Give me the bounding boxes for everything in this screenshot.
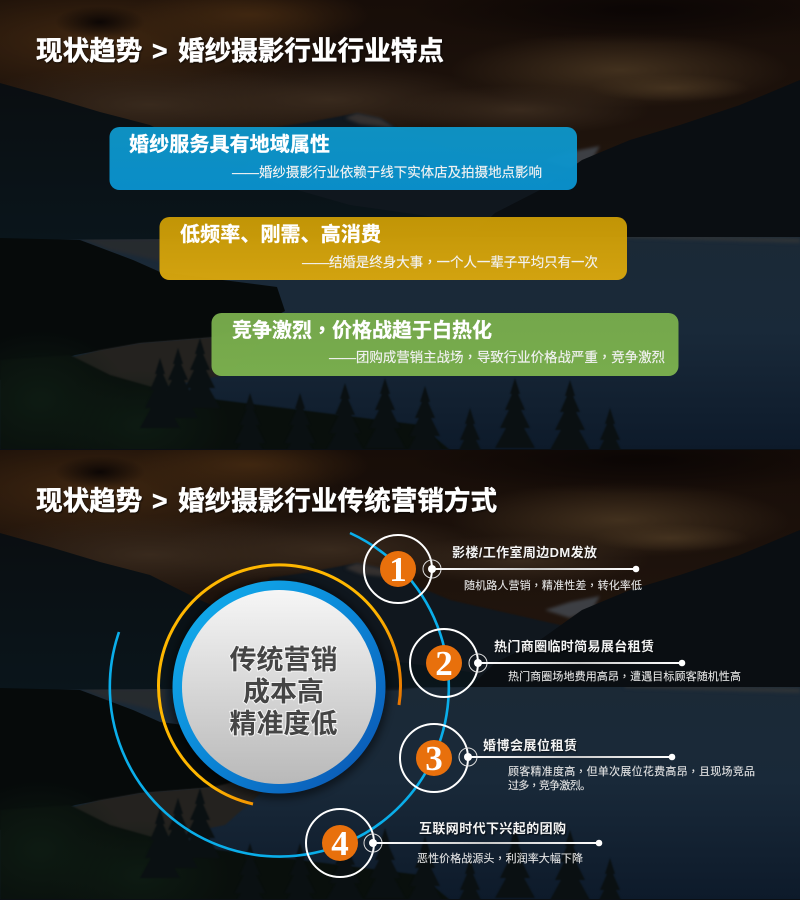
panel description: ——婚纱摄影行业依赖于线下实体店及拍摄地点影响	[232, 165, 542, 180]
item 3: wedding expo booth: 婚博会展位租赁	[483, 738, 577, 753]
heading: traditional marketing methods: 现状趋势	[36, 486, 142, 516]
item 2: temporary booth rental: 热门商圈临时简易展台租赁	[494, 639, 654, 654]
panel: low frequency, high spend	[160, 217, 627, 280]
item 4: online group buying: 4	[331, 824, 349, 863]
heading: traditional marketing methods: >	[152, 486, 168, 516]
item 2: temporary booth rental: 2	[435, 644, 453, 683]
central text	[230, 645, 338, 739]
heading: industry characteristics: 现状趋势	[36, 36, 142, 66]
heading: industry characteristics: 婚纱摄影行业行业特点	[178, 36, 444, 66]
item 3: wedding expo booth	[400, 724, 755, 793]
arc: outer blue ring	[110, 533, 449, 857]
central text: 传统营销	[230, 645, 338, 675]
item 1: DM flyers: 影楼/工作室周边DM发放	[452, 545, 597, 560]
heading: traditional marketing methods: 婚纱摄影行业传统营销方式	[178, 486, 497, 516]
item 2: temporary booth rental: 热门商圈场地费用高昂，遭遇目标顾客随机性高	[508, 668, 741, 684]
item 3: wedding expo booth: 顾客精准度高，但单次展位花费高昂，且现场竞品	[508, 763, 755, 779]
item 3: wedding expo booth: 过多，竞争激烈。	[508, 777, 591, 793]
panel: regional attribute	[110, 127, 577, 190]
panel: fierce competition	[212, 313, 678, 376]
panel description: ——结婚是终身大事，一个人一辈子平均只有一次	[302, 251, 598, 271]
central circle	[169, 579, 389, 799]
panel heading: 婚纱服务具有地域属性	[129, 133, 330, 156]
central text: 成本高	[243, 677, 324, 707]
item 4: online group buying: 恶性价格战源头，利润率大幅下降	[417, 850, 583, 866]
item 1: DM flyers: 1	[389, 550, 407, 589]
panel description: ——团购成营销主战场，导致行业价格战严重，竞争激烈	[329, 346, 665, 366]
arc: yellow-orange ring	[159, 565, 401, 804]
panel heading: 低频率、刚需、高消费	[180, 222, 381, 246]
background: upper slide landscape	[0, 0, 800, 480]
item 1: DM flyers	[364, 535, 642, 603]
item 1: DM flyers: 随机路人营销，精准性差，转化率低	[464, 577, 642, 593]
item 4: online group buying: 互联网时代下兴起的团购	[419, 821, 566, 836]
background: lower slide landscape	[0, 425, 800, 900]
heading: industry characteristics: >	[152, 36, 168, 66]
item 3: wedding expo booth: 3	[425, 739, 443, 778]
item 4: online group buying	[306, 809, 602, 877]
central text: 精准度低	[230, 709, 338, 739]
panel heading: 竞争激烈，价格战趋于白热化	[232, 314, 492, 343]
item 2: temporary booth rental	[410, 629, 741, 697]
